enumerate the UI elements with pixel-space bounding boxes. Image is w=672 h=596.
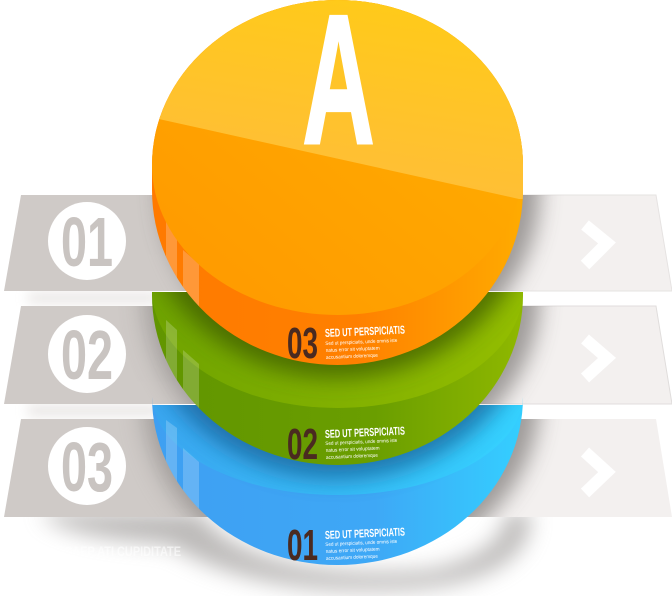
icon: chevron 1 (585, 225, 607, 265)
panel: row 03 left (4, 419, 208, 517)
panel: row 01 left (4, 195, 300, 303)
label 01: Sed ut perspiciatis, unde omnis iste (325, 539, 398, 548)
disc layer: orange (150, 0, 530, 368)
top face (152, 0, 523, 315)
label 03 (325, 325, 406, 361)
number 03: 03 (287, 319, 318, 368)
label 02: natus error sit voluptatem (326, 446, 380, 454)
side stripes (166, 222, 177, 278)
label 02 (325, 426, 406, 461)
icon: chevron 2 (585, 339, 607, 378)
number badge 02: 02 (61, 316, 113, 394)
label 02: Sed ut perspiciatis, unde omnis iste (325, 438, 398, 447)
number 01: 01 (287, 521, 318, 570)
panel: row 02 right (162, 306, 672, 404)
top face highlight (150, 0, 530, 199)
label 03: accusantium doloremque (326, 353, 378, 361)
label 03: natus error sit voluptatem (326, 346, 380, 354)
label 02: SED UT PERSPICIATIS (325, 426, 405, 441)
panel: row 03 right (165, 419, 672, 517)
faint caption under panels: OBCAEP ATI CUPIDITATE (48, 543, 181, 559)
panel: row 02 left (4, 306, 195, 419)
number badge 03: 03 (61, 428, 113, 506)
label 01: SED UT PERSPICIATIS (325, 527, 405, 542)
label 01: natus error sit voluptatem (326, 547, 380, 555)
number 02: 02 (287, 420, 318, 469)
label 03: SED UT PERSPICIATIS (325, 325, 405, 340)
panel: row 01 right (148, 194, 672, 292)
label 01 (325, 527, 406, 562)
ground shadow (40, 512, 530, 590)
icon: chevron 3 (585, 452, 607, 493)
label 03: Sed ut perspiciatis, unde omnis iste (325, 338, 398, 347)
disc layer: green (152, 292, 523, 465)
number badge 01: 01 (61, 203, 113, 281)
label 01: accusantium doloremque (326, 554, 378, 562)
disc layer: blue (152, 398, 523, 565)
label 02: accusantium doloremque (326, 453, 378, 461)
